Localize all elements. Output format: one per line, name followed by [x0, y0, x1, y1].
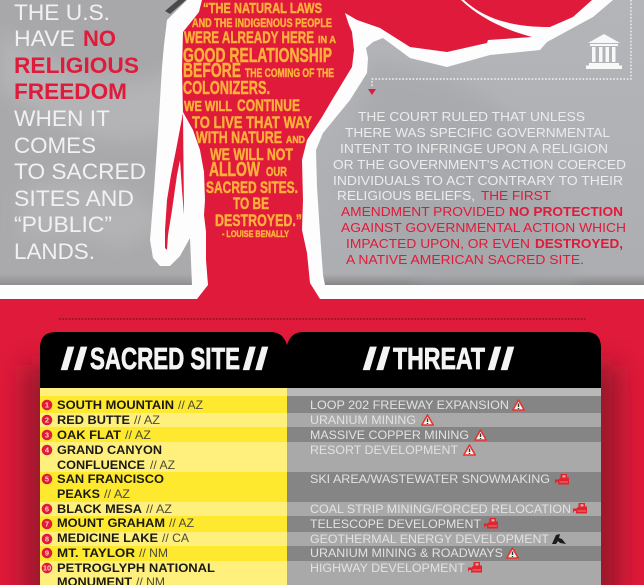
threat descriptions: MASSIVE COPPER MINING	[310, 428, 469, 442]
sacred site names: SAN FRANCISCO	[57, 472, 164, 486]
sacred site names: // AZ	[104, 487, 130, 501]
sacred site names: // AZ	[169, 516, 194, 530]
table shadow	[24, 365, 620, 585]
left headline text: HAVE	[14, 26, 75, 51]
number badges: 4	[45, 446, 50, 455]
sacred site names: // AZ	[146, 502, 172, 516]
court ruling text: AMENDMENT PROVIDED	[341, 204, 505, 219]
left headline text: NO	[83, 26, 116, 51]
column: threat stripes	[287, 388, 601, 585]
left headline text: FREEDOM	[14, 79, 127, 104]
quote by Louise Benally: BEFORE	[183, 60, 241, 82]
left headline text	[14, 0, 146, 264]
table header: //	[61, 341, 88, 376]
number badges	[42, 400, 52, 573]
threat descriptions: RESORT DEVELOPMENT	[310, 443, 459, 457]
icon: dark feather stroke	[165, 0, 186, 14]
sacred site names: MT. TAYLOR	[57, 546, 135, 560]
quote by Louise Benally: COLONIZERS.	[183, 78, 270, 98]
court ruling text: THE FIRST	[481, 188, 551, 203]
table header: //	[488, 341, 515, 376]
left headline text: THE U.S.	[14, 0, 110, 25]
threat descriptions: LOOP 202 FREEWAY EXPANSION	[310, 398, 509, 412]
threat descriptions: TELESCOPE DEVELOPMENT	[310, 517, 482, 531]
court ruling text: INDIVIDUALS TO ACT CONTRARY TO THEIR	[333, 173, 623, 188]
table header: THREAT	[393, 341, 485, 376]
left headline text: TO SACRED	[14, 159, 146, 184]
dotted divider	[59, 318, 586, 320]
court ruling text: A NATIVE AMERICAN SACRED SITE.	[346, 252, 584, 267]
sacred site names: // AZ	[150, 458, 175, 472]
quote by Louise Benally: TO BE	[233, 194, 269, 213]
court ruling text: INTENT TO INFRINGE UPON A RELIGION	[340, 141, 608, 156]
panel: right grey background	[310, 0, 644, 285]
sacred site names: OAK FLAT	[57, 428, 122, 442]
sacred site names: CONFLUENCE	[57, 458, 145, 472]
quote by Louise Benally: CONTINUE	[237, 96, 300, 115]
dotted connector	[372, 0, 631, 86]
quote by Louise Benally: SACRED SITES.	[206, 178, 298, 197]
threat descriptions: GEOTHERMAL ENERGY DEVELOPMENT	[310, 532, 550, 546]
court ruling text	[333, 109, 626, 267]
sacred site names: PEAKS	[57, 487, 100, 501]
quote by Louise Benally: WE WILL NOT	[210, 145, 293, 164]
left headline text: LANDS.	[14, 239, 95, 264]
quote by Louise Benally: DESTROYED.”	[215, 211, 302, 230]
sacred site names: GRAND CANYON	[57, 443, 162, 457]
court ruling text: DESTROYED,	[535, 236, 623, 251]
sacred site names: // CA	[162, 531, 189, 545]
court ruling text: AGAINST GOVERNMENTAL ACTION WHICH	[341, 220, 626, 235]
table header	[40, 332, 601, 388]
table header: SACRED SITE	[90, 341, 240, 376]
threat descriptions: URANIUM MINING	[310, 413, 416, 427]
quote by Louise Benally: WE WILL	[184, 98, 232, 115]
table header: //	[243, 341, 269, 376]
threat descriptions: HIGHWAY DEVELOPMENT	[310, 561, 466, 575]
number badges: 2	[45, 416, 49, 425]
number badges: 10	[43, 564, 51, 573]
threat icons	[422, 400, 587, 572]
threat descriptions: COAL STRIP MINING/FORCED RELOCATION	[310, 502, 571, 516]
quote by Louise Benally: OUR	[266, 165, 287, 179]
threat descriptions: SKI AREA/WASTEWATER SNOWMAKING	[310, 472, 550, 486]
court ruling text: THERE WAS SPECIFIC GOVERNMENTAL	[345, 125, 610, 140]
quote by Louise Benally: ALLOW	[209, 159, 260, 181]
court ruling text: NO PROTECTION	[509, 204, 623, 219]
figure: red silhouette	[165, 0, 592, 301]
sacred site names: MEDICINE LAKE	[57, 531, 158, 545]
threat descriptions: URANIUM MINING & ROADWAYS	[310, 546, 503, 560]
figure: white silhouette outline	[150, 0, 613, 299]
left headline text: WHEN IT	[14, 106, 110, 131]
table	[40, 332, 601, 585]
court ruling text: OR THE GOVERNMENT'S ACTION COERCED	[333, 157, 626, 172]
sacred site names: MOUNT GRAHAM	[57, 516, 165, 530]
sacred site names: // AZ	[178, 398, 203, 412]
left headline text: “PUBLIC”	[14, 212, 112, 237]
court ruling text: IMPACTED UPON, OR EVEN	[346, 236, 530, 251]
quote by Louise Benally: - LOUISE BENALLY	[222, 229, 289, 239]
quote by Louise Benally: TO LIVE THAT WAY	[192, 113, 313, 132]
icon: red down arrow	[368, 89, 376, 95]
quote by Louise Benally: WITH NATURE	[196, 129, 282, 147]
sacred site names: PETROGLYPH NATIONAL	[57, 561, 215, 575]
quote by Louise Benally: GOOD RELATIONSHIP	[183, 45, 332, 67]
table header: //	[363, 341, 391, 376]
left headline text: COMES	[14, 133, 96, 158]
court ruling text: THE COURT RULED THAT UNLESS	[358, 109, 585, 124]
left headline text: SITES AND	[14, 186, 134, 211]
column: sacred site stripes	[40, 388, 287, 585]
sacred site names: // AZ	[125, 428, 151, 442]
sacred site names: // NM	[139, 546, 168, 560]
threat descriptions	[310, 398, 571, 575]
sacred site names	[57, 398, 215, 585]
panel: left grey background	[0, 0, 195, 285]
quote by Louise Benally: AND THE INDIGENOUS PEOPLE	[192, 16, 332, 30]
quote by Louise Benally	[183, 0, 336, 239]
number badges: 5	[45, 475, 49, 484]
quote by Louise Benally: “THE NATURAL LAWS	[203, 0, 322, 17]
icon: courthouse	[586, 34, 622, 69]
number badges: 1	[45, 401, 49, 410]
left headline text: RELIGIOUS	[14, 53, 139, 78]
sacred site names: BLACK MESA	[57, 502, 142, 516]
white band below panels	[0, 285, 644, 299]
sacred site names: RED BUTTE	[57, 413, 130, 427]
sacred site names: // AZ	[134, 413, 160, 427]
quote by Louise Benally: THE COMING OF THE	[245, 68, 334, 80]
quote by Louise Benally: IN A	[318, 35, 336, 46]
number badges: 8	[45, 535, 49, 544]
quote by Louise Benally: AND	[286, 134, 305, 146]
quote by Louise Benally: WERE ALREADY HERE	[184, 29, 314, 47]
number badges: 9	[45, 549, 49, 558]
court ruling text: RELIGIOUS BELIEFS,	[337, 188, 475, 203]
number badges: 7	[45, 520, 49, 529]
number badges: 6	[45, 505, 49, 514]
sacred site names: SOUTH MOUNTAIN	[57, 398, 174, 412]
number badges: 3	[45, 431, 49, 440]
